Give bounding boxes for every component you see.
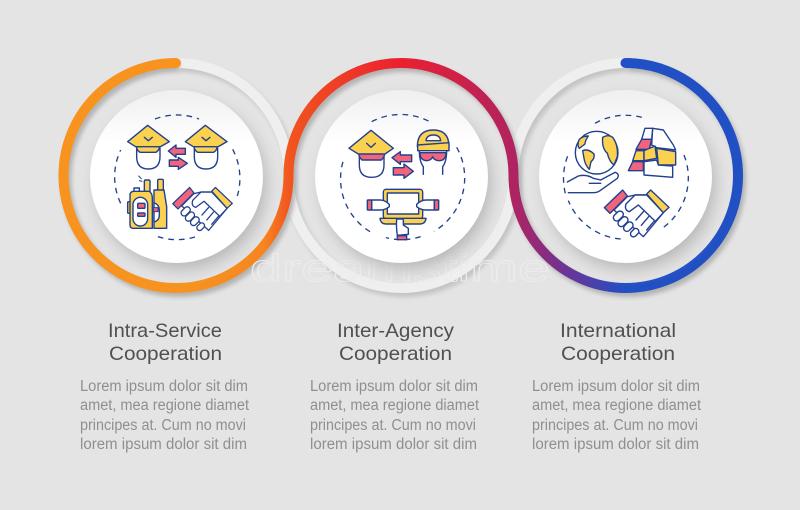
panel: inter-agency icon disc bbox=[315, 90, 491, 269]
text block: column 1: Lorem ipsum dolor sit dim bbox=[80, 378, 248, 395]
heading: Inter-Agency Cooperation: Inter-Agency bbox=[337, 320, 454, 342]
heading: Intra-Service Cooperation: Cooperation bbox=[109, 343, 222, 365]
panel: intra-service icon disc bbox=[90, 90, 266, 269]
text block: column 3: amet, mea regione diamet bbox=[532, 397, 702, 414]
text block: column 3: principes at. Cum no movi bbox=[532, 417, 698, 434]
heading: International Cooperation: Cooperation bbox=[561, 343, 675, 365]
icon: inter-agency bbox=[341, 114, 465, 240]
text block: column 1: lorem ipsum dolor sit dim bbox=[80, 436, 247, 453]
panel: international icon disc bbox=[539, 90, 715, 269]
text block: column 2: principes at. Cum no movi bbox=[310, 417, 476, 434]
watermark: dreamstime bbox=[250, 248, 550, 290]
text block: column 2: Lorem ipsum dolor sit dim bbox=[310, 378, 478, 395]
heading: Inter-Agency Cooperation: Cooperation bbox=[339, 343, 452, 365]
looped ribbon timeline bbox=[64, 63, 741, 292]
text block: column 1: amet, mea regione diamet bbox=[80, 397, 250, 414]
text block: column 3: lorem ipsum dolor sit dim bbox=[532, 436, 699, 453]
icon: international bbox=[563, 115, 688, 239]
heading: Intra-Service Cooperation: Intra-Service bbox=[108, 320, 222, 342]
heading: International Cooperation: International bbox=[560, 320, 676, 342]
icon: handshake bbox=[173, 187, 232, 232]
icon: intra-service bbox=[115, 115, 240, 240]
watermark bbox=[250, 230, 550, 290]
icon: handshake bbox=[604, 190, 669, 238]
text block: column 2: lorem ipsum dolor sit dim bbox=[310, 436, 477, 453]
text block: column 3: Lorem ipsum dolor sit dim bbox=[532, 378, 700, 395]
text block: column 2: amet, mea regione diamet bbox=[310, 397, 480, 414]
text block: column 1: principes at. Cum no movi bbox=[80, 417, 246, 434]
